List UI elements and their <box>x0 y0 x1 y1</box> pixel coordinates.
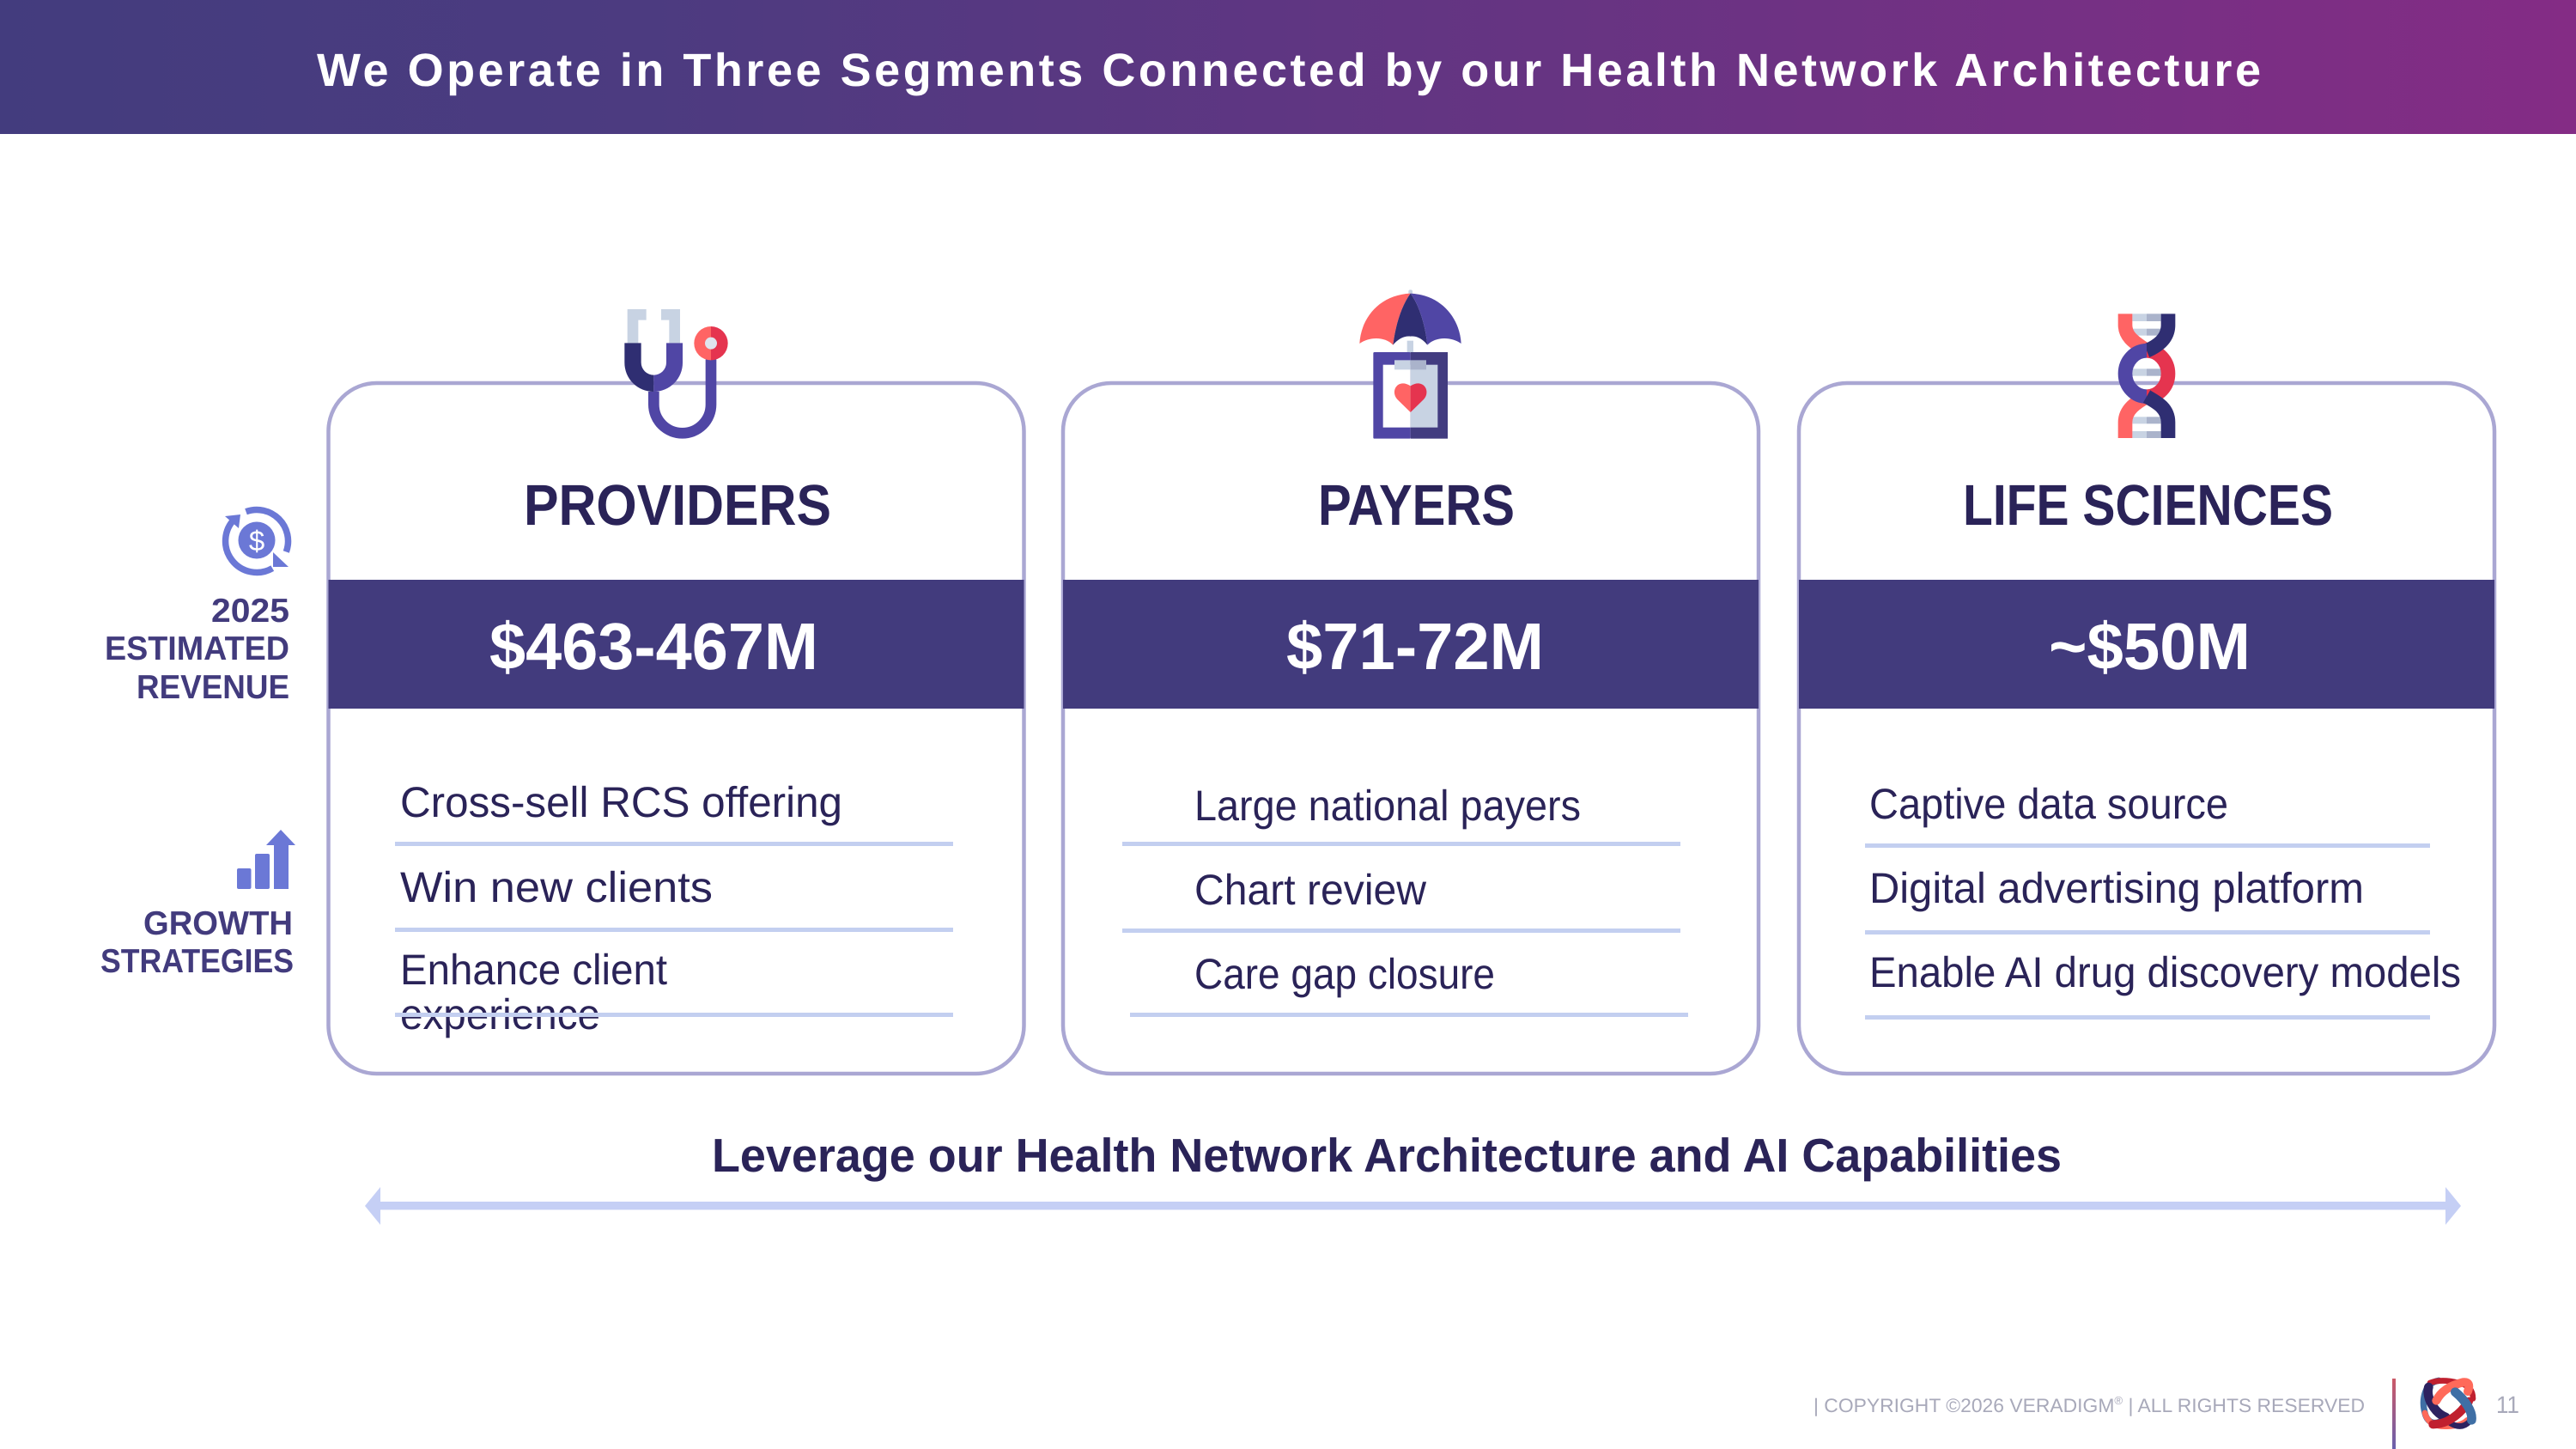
icon: revenue cycle: $ <box>249 525 264 557</box>
row label: 2025 estimated revenue <box>105 509 289 706</box>
icon: growth bars with arrow <box>237 830 295 889</box>
logo: veradigm <box>2423 1380 2473 1427</box>
arrow: double-headed span <box>365 1187 2461 1225</box>
icon: umbrella and clipboard <box>1359 289 1461 439</box>
strategies list: life sciences: Digital advertising platform <box>1869 864 2364 912</box>
row label: 2025 estimated revenue: REVENUE <box>137 669 289 706</box>
row label: growth strategies: STRATEGIES <box>100 943 294 980</box>
strategies list: life sciences <box>1865 780 2461 1020</box>
revenue band: payers: $71-72M <box>1286 610 1544 684</box>
footer divider <box>2392 1379 2396 1449</box>
strategies list: providers: Cross-sell RCS offering <box>400 778 842 826</box>
revenue band: providers: $463-467M <box>489 610 818 684</box>
row label: 2025 estimated revenue: ESTIMATED <box>105 630 289 667</box>
panel: payers <box>1063 383 1759 1074</box>
row label: growth strategies <box>100 830 295 980</box>
heading: life sciences: LIFE SCIENCES <box>1963 473 2333 538</box>
strategies list: payers: Large national payers <box>1194 782 1581 830</box>
footer copyright: | COPYRIGHT ©2026 VERADIGM <box>1814 1395 2110 1416</box>
strategies list: providers: Win new clients <box>400 863 713 911</box>
row label: 2025 estimated revenue: 2025 <box>211 593 289 630</box>
strategies list: payers: Care gap closure <box>1194 950 1495 998</box>
icon: stethoscope <box>624 309 728 433</box>
footer copyright: | ALL RIGHTS RESERVED <box>2123 1395 2365 1416</box>
revenue band: life sciences <box>1799 580 2494 709</box>
strategies list: life sciences: Enable AI drug discovery models <box>1869 948 2461 996</box>
revenue band: providers <box>328 580 1024 709</box>
heading: leverage statement: Leverage our Health Network Architecture and AI Capabilities <box>712 1129 2062 1182</box>
strategies list: payers <box>1122 782 1688 1017</box>
strategies list: life sciences: Captive data source <box>1869 780 2228 828</box>
panel: providers <box>328 383 1024 1074</box>
strategies list: providers: experience <box>400 990 600 1038</box>
strategies list: payers: Chart review <box>1194 866 1427 914</box>
panel: life sciences <box>1799 383 2494 1074</box>
page number: 11 <box>2496 1391 2519 1418</box>
footer copyright: ® <box>2114 1394 2123 1407</box>
strategies list: providers: Enhance client <box>400 946 667 994</box>
heading: providers: PROVIDERS <box>524 473 831 538</box>
icon: dna helix <box>2125 314 2168 438</box>
heading: payers: PAYERS <box>1318 473 1515 538</box>
strategies list: providers <box>395 778 953 1038</box>
row label: growth strategies: GROWTH <box>143 905 293 942</box>
revenue band: life sciences: ~$50M <box>2049 610 2251 684</box>
header banner <box>0 0 2576 134</box>
icon: revenue cycle <box>225 509 289 572</box>
revenue band: payers <box>1063 580 1759 709</box>
title: We Operate in Three Segments Connected by our Health Network Architecture <box>317 45 2261 96</box>
